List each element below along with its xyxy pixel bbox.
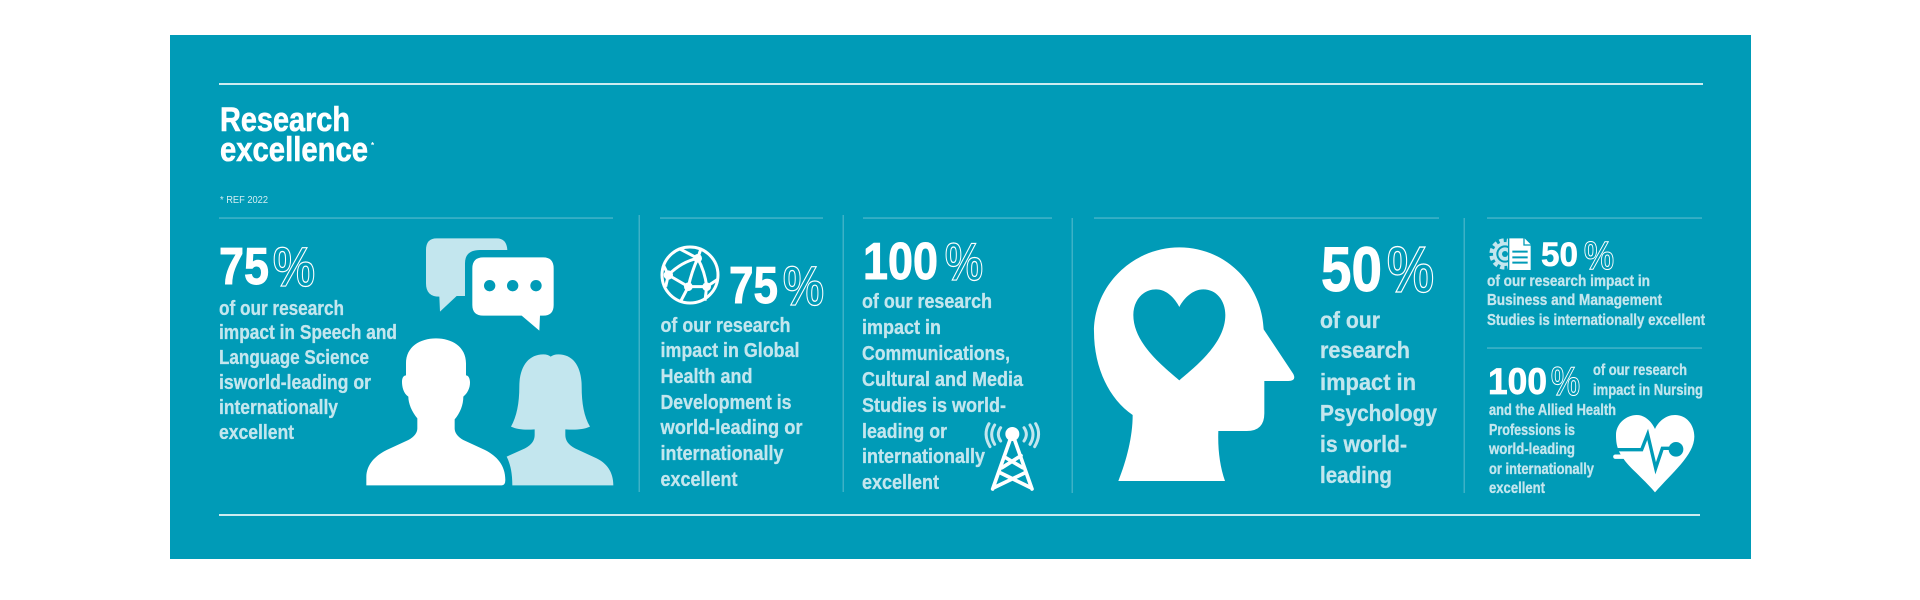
stat: 50 percent: %	[1584, 234, 1614, 278]
stat: 50 percent	[1321, 233, 1434, 306]
text: business description	[1487, 273, 1705, 329]
text: global health description: world-leading or	[660, 416, 803, 439]
text: communications description: Studies is world-	[862, 394, 1006, 417]
text: global health description: Health and	[660, 365, 752, 388]
text: psychology description: research	[1320, 337, 1410, 363]
icon: globe network	[662, 247, 718, 303]
stat: 75 percent: 75	[219, 238, 269, 296]
text: speech and language description: internationally	[219, 397, 339, 419]
title: Research	[220, 101, 350, 139]
title: excellence	[220, 131, 368, 169]
icon: radio tower	[986, 424, 1039, 489]
text: communications description: excellent	[862, 471, 939, 494]
text: nursing description: and the Allied Health	[1489, 402, 1616, 419]
text: nursing description: impact in Nursing	[1593, 382, 1703, 399]
stat: 75 percent: %	[273, 235, 315, 298]
text: psychology description: of our	[1320, 307, 1380, 333]
text: psychology description: Psychology	[1320, 400, 1437, 426]
footnote: * REF 2022	[220, 194, 268, 206]
text: psychology description	[1320, 307, 1437, 488]
text: nursing description: or internationally	[1489, 461, 1594, 478]
text: global health description: excellent	[660, 468, 738, 491]
stat: 100 percent: 100	[1488, 361, 1547, 402]
text: psychology description: leading	[1320, 462, 1392, 488]
icon: heart with pulse	[1615, 415, 1694, 492]
text: communications description: of our research	[862, 290, 992, 313]
text: psychology description: impact in	[1320, 369, 1416, 395]
stat: 100 percent: 100	[863, 233, 938, 291]
text: speech and language description: Language Science	[219, 347, 369, 369]
text: communications description: internationally	[862, 445, 986, 468]
panel: communications, cultural and media studies	[862, 233, 1039, 494]
text: speech and language description: excellent	[219, 422, 294, 444]
text: global health description	[660, 314, 803, 491]
stat: 100 percent: %	[945, 233, 983, 292]
title: *	[371, 141, 375, 150]
stat: 75 percent	[219, 235, 315, 298]
text: nursing description: world-leading	[1488, 441, 1575, 458]
stat: 75 percent	[729, 254, 824, 317]
text: global health description: impact in Global	[660, 339, 800, 362]
text: speech and language description: impact in Speech and	[219, 322, 397, 344]
text: global health description: Development is	[660, 391, 792, 414]
text: psychology description: is world-	[1320, 431, 1407, 457]
stat: 50 percent	[1541, 234, 1614, 278]
text: communications description: impact in	[862, 316, 941, 339]
text: speech and language description: isworld-leading or	[219, 372, 371, 394]
title	[220, 101, 375, 169]
text: communications description	[862, 290, 1024, 494]
text: business description: Studies is internationally excellent	[1487, 312, 1705, 329]
stat: 50 percent: 50	[1541, 236, 1578, 274]
panel: psychology	[1094, 233, 1437, 488]
text: communications description: Cultural and Media	[862, 368, 1024, 391]
stat: 75 percent: 75	[729, 257, 778, 315]
text: nursing description: of our research	[1593, 362, 1687, 379]
text: speech and language description	[219, 298, 397, 444]
text: business description: Business and Management	[1487, 292, 1662, 309]
panel: speech and language science	[219, 235, 613, 485]
stat: 75 percent: %	[783, 254, 824, 317]
icon: head with heart	[1094, 247, 1294, 481]
text: nursing description: Professions is	[1489, 422, 1575, 439]
text: nursing description: excellent	[1489, 480, 1545, 497]
icon: speech bubbles	[426, 238, 554, 331]
text: business description: of our research impact in	[1487, 273, 1650, 290]
stat: 100 percent	[1488, 358, 1580, 404]
panel: global health and development	[660, 247, 824, 491]
panel: business and management	[1487, 234, 1705, 329]
text: speech and language description: of our research	[219, 298, 344, 320]
icon: man and woman silhouettes	[366, 338, 613, 485]
text: global health description: of our research	[660, 314, 790, 337]
text: communications description: leading or	[862, 420, 947, 443]
icon: gear and document	[1491, 237, 1533, 272]
text: communications description: Communications,	[862, 342, 1010, 365]
panel: teal background	[170, 35, 1751, 559]
text: nursing description	[1488, 362, 1703, 497]
stat: 50 percent: %	[1387, 233, 1434, 306]
stat: 50 percent: 50	[1321, 235, 1382, 305]
stat: 100 percent: %	[1551, 358, 1580, 404]
text: global health description: internationally	[660, 442, 784, 465]
panel: nursing and allied health	[1488, 358, 1703, 497]
